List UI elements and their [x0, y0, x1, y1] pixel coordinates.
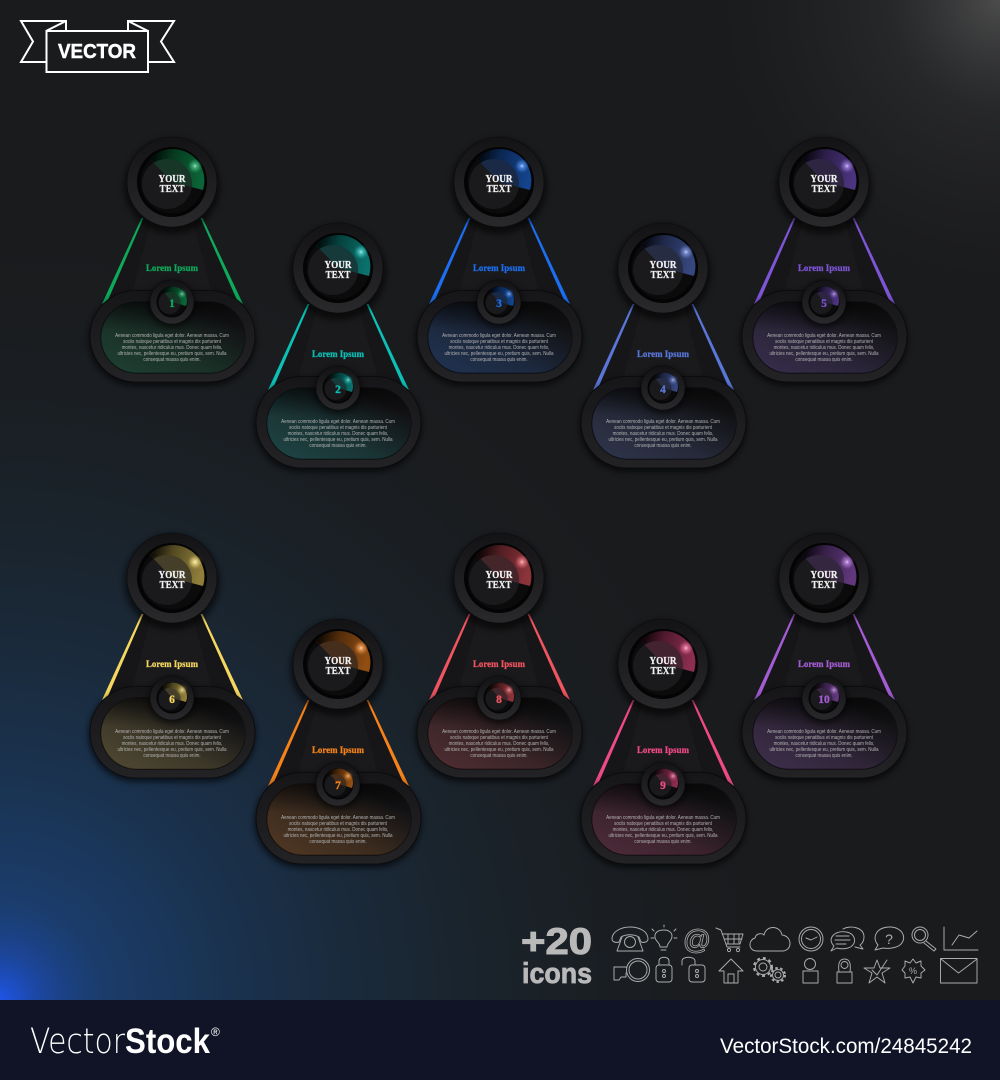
body text: sociis natoque penatibus et magnis dis parturient	[289, 821, 387, 827]
body text: ultricies nec, pellentesque eu, pretium quis, sem. Nulla	[117, 351, 227, 357]
icon: line chart	[944, 927, 978, 950]
body text: ultricies nec, pellentesque eu, pretium quis, sem. Nulla	[769, 747, 879, 753]
body text: consequat massa quis enim.	[309, 839, 367, 845]
circle label: YOUR	[485, 174, 514, 185]
circle label: TEXT	[486, 580, 512, 591]
heading: Lorem Ipsum	[637, 745, 689, 755]
body text: montes, nascetur ridiculus mus. Donec quam felis,	[122, 741, 222, 747]
circle label: YOUR	[324, 260, 353, 271]
footer logo: Stock	[125, 1022, 210, 1061]
icon: woman	[837, 959, 852, 983]
number: 1	[169, 298, 175, 310]
footer logo: ®	[211, 1025, 220, 1039]
icon: light bulb	[651, 925, 677, 950]
card 3: blue	[415, 137, 583, 386]
card 9: pink	[579, 619, 747, 868]
circle label: TEXT	[650, 270, 676, 281]
icon: question bubble: ?	[885, 931, 893, 947]
body text: ultricies nec, pellentesque eu, pretium quis, sem. Nulla	[608, 833, 718, 839]
card 8: red	[415, 533, 583, 782]
circle label: YOUR	[158, 570, 187, 581]
body text: consequat massa quis enim.	[470, 753, 528, 759]
icon: chat bubbles	[831, 927, 864, 951]
body text: sociis natoque penatibus et magnis dis parturient	[123, 735, 221, 741]
icon set	[612, 924, 978, 983]
heading: Lorem Ipsum	[146, 659, 198, 669]
number: 7	[335, 780, 341, 792]
circle label: YOUR	[649, 260, 678, 271]
body text: montes, nascetur ridiculus mus. Donec quam felis,	[613, 431, 713, 437]
circle label: YOUR	[810, 174, 839, 185]
body text: consequat massa quis enim.	[795, 753, 853, 759]
body text: consequat massa quis enim.	[470, 357, 528, 363]
body text: ultricies nec, pellentesque eu, pretium quis, sem. Nulla	[117, 747, 227, 753]
heading: Lorem Ipsum	[798, 263, 850, 273]
heading: Lorem Ipsum	[146, 263, 198, 273]
body text: Aenean commodo ligula eget dolor. Aenean massa. Cum	[767, 333, 881, 339]
body text: Aenean commodo ligula eget dolor. Aenean massa. Cum	[281, 815, 395, 821]
icon: telephone	[612, 927, 648, 951]
card 1: green	[88, 137, 256, 386]
footer id: VectorStock.com/24845242	[720, 1035, 972, 1058]
footer logo: Vector	[30, 1022, 126, 1062]
body text: sociis natoque penatibus et magnis dis parturient	[614, 425, 712, 431]
circle label: YOUR	[158, 174, 187, 185]
body text: Aenean commodo ligula eget dolor. Aenean massa. Cum	[442, 729, 556, 735]
icon: key	[614, 958, 650, 982]
body text: consequat massa quis enim.	[634, 443, 692, 449]
icon: man	[803, 958, 818, 983]
heading: Lorem Ipsum	[473, 659, 525, 669]
icon: house	[719, 959, 743, 983]
icon: closed lock	[656, 957, 672, 982]
badge: vector ribbon	[21, 21, 174, 72]
body text: montes, nascetur ridiculus mus. Donec quam felis,	[449, 345, 549, 351]
number: 8	[496, 694, 502, 706]
body text: Aenean commodo ligula eget dolor. Aenean massa. Cum	[442, 333, 556, 339]
card 5: violet	[740, 137, 908, 386]
number: 5	[821, 298, 827, 310]
body text: Aenean commodo ligula eget dolor. Aenean massa. Cum	[115, 333, 229, 339]
icon: shopping cart	[716, 928, 743, 952]
badge: vector ribbon: VECTOR	[58, 41, 137, 63]
body text: ultricies nec, pellentesque eu, pretium quis, sem. Nulla	[769, 351, 879, 357]
circle label: YOUR	[324, 656, 353, 667]
body text: sociis natoque penatibus et magnis dis parturient	[450, 735, 548, 741]
body text: Aenean commodo ligula eget dolor. Aenean massa. Cum	[281, 419, 395, 425]
icon: percent badge: %	[909, 966, 917, 976]
icon: envelope	[940, 958, 977, 983]
heading: Lorem Ipsum	[312, 745, 364, 755]
body text: sociis natoque penatibus et magnis dis parturient	[289, 425, 387, 431]
heading: Lorem Ipsum	[312, 349, 364, 359]
number: 9	[660, 780, 666, 792]
number: 3	[496, 298, 502, 310]
icon: at sign: @	[683, 924, 711, 955]
circle label: TEXT	[159, 580, 185, 591]
number: 4	[660, 384, 666, 396]
body text: montes, nascetur ridiculus mus. Donec quam felis,	[288, 827, 388, 833]
body text: ultricies nec, pellentesque eu, pretium quis, sem. Nulla	[283, 437, 393, 443]
card 10: purple	[740, 533, 908, 782]
footer band	[0, 1000, 1000, 1080]
body text: montes, nascetur ridiculus mus. Donec quam felis,	[774, 741, 874, 747]
body text: Aenean commodo ligula eget dolor. Aenean massa. Cum	[606, 815, 720, 821]
circle label: TEXT	[325, 666, 351, 677]
circle label: YOUR	[485, 570, 514, 581]
body text: montes, nascetur ridiculus mus. Donec quam felis,	[288, 431, 388, 437]
icon: gears	[754, 958, 785, 982]
body text: consequat massa quis enim.	[309, 443, 367, 449]
icon: question bubble	[875, 927, 904, 950]
body text: Aenean commodo ligula eget dolor. Aenean massa. Cum	[115, 729, 229, 735]
body text: Aenean commodo ligula eget dolor. Aenean massa. Cum	[606, 419, 720, 425]
body text: sociis natoque penatibus et magnis dis parturient	[614, 821, 712, 827]
card 4: indigo	[579, 223, 747, 472]
icon: star check	[864, 960, 890, 983]
body text: sociis natoque penatibus et magnis dis parturient	[123, 339, 221, 345]
number: 6	[169, 694, 175, 706]
footer logo	[30, 1022, 220, 1062]
icons caption	[521, 921, 592, 990]
body text: ultricies nec, pellentesque eu, pretium quis, sem. Nulla	[283, 833, 393, 839]
card 6: yellow	[88, 533, 256, 782]
body text: ultricies nec, pellentesque eu, pretium quis, sem. Nulla	[444, 351, 554, 357]
body text: consequat massa quis enim.	[795, 357, 853, 363]
body text: sociis natoque penatibus et magnis dis parturient	[775, 339, 873, 345]
circle label: TEXT	[811, 184, 837, 195]
circle label: YOUR	[649, 656, 678, 667]
icons caption: +20	[521, 921, 592, 962]
body text: ultricies nec, pellentesque eu, pretium quis, sem. Nulla	[444, 747, 554, 753]
body text: ultricies nec, pellentesque eu, pretium quis, sem. Nulla	[608, 437, 718, 443]
circle label: YOUR	[810, 570, 839, 581]
card 7: orange	[254, 619, 422, 868]
number: 2	[335, 384, 341, 396]
icon: percent badge	[902, 959, 925, 983]
number: 10	[818, 694, 830, 706]
body text: sociis natoque penatibus et magnis dis parturient	[775, 735, 873, 741]
circle label: TEXT	[325, 270, 351, 281]
body text: montes, nascetur ridiculus mus. Donec quam felis,	[613, 827, 713, 833]
body text: montes, nascetur ridiculus mus. Donec quam felis,	[449, 741, 549, 747]
heading: Lorem Ipsum	[473, 263, 525, 273]
icon: magnifier	[912, 927, 936, 951]
heading: Lorem Ipsum	[798, 659, 850, 669]
circle label: TEXT	[159, 184, 185, 195]
body text: consequat massa quis enim.	[634, 839, 692, 845]
body text: consequat massa quis enim.	[143, 753, 201, 759]
circle label: TEXT	[811, 580, 837, 591]
body text: consequat massa quis enim.	[143, 357, 201, 363]
heading: Lorem Ipsum	[637, 349, 689, 359]
card 2: teal	[254, 223, 422, 472]
icon: cloud	[750, 928, 790, 951]
icon: open lock	[682, 957, 705, 982]
body text: montes, nascetur ridiculus mus. Donec quam felis,	[774, 345, 874, 351]
circle label: TEXT	[486, 184, 512, 195]
icons caption: icons	[522, 958, 592, 990]
body text: montes, nascetur ridiculus mus. Donec quam felis,	[122, 345, 222, 351]
icon: clock	[799, 927, 823, 951]
body text: Aenean commodo ligula eget dolor. Aenean massa. Cum	[767, 729, 881, 735]
circle label: TEXT	[650, 666, 676, 677]
body text: sociis natoque penatibus et magnis dis parturient	[450, 339, 548, 345]
